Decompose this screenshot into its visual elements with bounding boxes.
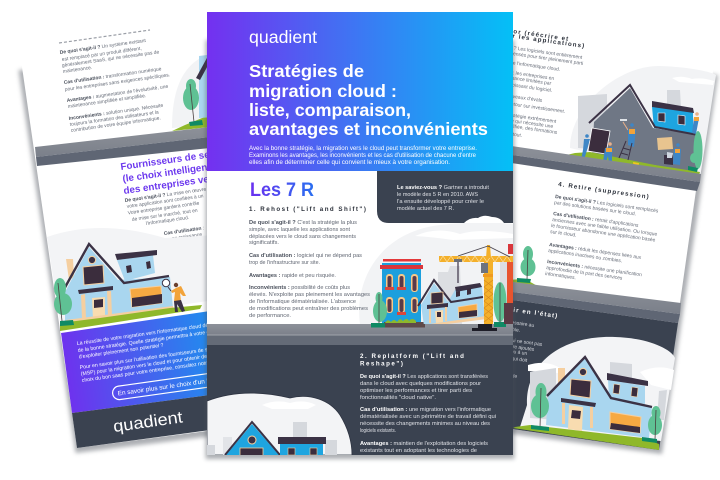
heading: Refactor: restructurer les applications) bbox=[468, 27, 586, 50]
road band: right page top bbox=[505, 145, 701, 191]
grass and bucket bbox=[558, 152, 700, 178]
text block: refactor details: le coût croissant du logiciel. bbox=[492, 80, 553, 94]
text block: service providers bbox=[124, 186, 225, 304]
heading: Fournisseurs de services: des entreprises vertes) bbox=[123, 171, 231, 197]
text block: service providers: revue bbox=[193, 296, 207, 304]
text block: service providers: l'organisation bbox=[183, 248, 213, 258]
text block: retain details: de bbox=[511, 373, 518, 380]
text block: top section of left page: toujours la formation des utilisateurs et la bbox=[69, 110, 159, 128]
text block: rehost details: Inconvénients : possibilité de coûts plus bbox=[249, 285, 350, 291]
house lifted by crane bbox=[418, 280, 487, 327]
text block: top section of left page: pour les entreprises sans exigences spécifiques. bbox=[64, 72, 170, 93]
text block: call to action copy: de la bonne stratégie. Quelle stratégie permettra à votre entreprise bbox=[77, 327, 230, 354]
tree left of building bbox=[371, 292, 387, 327]
panel: center page bbox=[206, 12, 514, 459]
text block: rehost details bbox=[249, 220, 370, 319]
heading: Les 7 R: Les 7 R bbox=[250, 179, 314, 201]
text block: call to action copy: choix du bon saas pour votre entreprise, consultez notre guide bbox=[81, 358, 224, 384]
text block: replatform details: De quoi s'agit-il ? Les applications sont transférées bbox=[360, 374, 488, 380]
logo: quadient footer: quadient bbox=[112, 408, 184, 436]
text block: retire details: sur le cloud. bbox=[550, 229, 577, 239]
text block: retire details: applications inactives ou zombies. bbox=[548, 248, 622, 264]
callout: Le saviez-vous: l'a ensuite développé pour créer le bbox=[397, 199, 484, 205]
text block: service providers: souhaitent bbox=[176, 238, 200, 247]
title: avantages et inconvénients bbox=[249, 119, 488, 139]
text block: retire details: approfondie de la part des services bbox=[546, 265, 623, 282]
text block: replatform details: existants tout en adoptant les technologies de bbox=[360, 448, 477, 454]
text block: replatform details: Avantages : maintien de l'exploitation des logiciels bbox=[360, 441, 488, 447]
illustration: blue house in bottom blob bbox=[207, 393, 352, 456]
panel: dark section of right page bbox=[505, 299, 678, 450]
illustration: house with inspector on left page bbox=[47, 228, 215, 331]
text block: retire details: Avantages : réduit les dépenses liées aux bbox=[549, 242, 642, 261]
text block: retain details: encore ajoutés bbox=[502, 343, 535, 353]
text block: rehost details: significatifs. bbox=[249, 240, 279, 246]
text block: top section of left page: De quoi s'agit-il ? Un système existant bbox=[59, 38, 147, 56]
text block: rehost details: élevés. N'exploite pas pleinement les avantages bbox=[249, 292, 370, 298]
text block: refactor details: Cas : les entreprises en bbox=[502, 69, 555, 82]
text block: top section of left page: maintenance simplifiée et simplifiée. bbox=[67, 93, 147, 110]
text block: service providers: l'informatique cloud. bbox=[145, 215, 190, 227]
text block: retire details: anciennes avec une faible utilisation. Ou lorsque bbox=[552, 217, 658, 238]
text block: retire details: De quoi s'agit-il ? Les logiciels sont remplacés bbox=[555, 194, 659, 215]
button: En savoir plus: En savoir plus sur le choix d'un MSP bbox=[117, 376, 221, 397]
text block: refactor details: De quoi s'agit-il ? Les logiciels sont entièrement bbox=[476, 40, 583, 61]
title bbox=[249, 61, 488, 139]
illustration: workers renovating a grey house bbox=[558, 66, 716, 178]
illustration: pastel house on right page bbox=[513, 337, 675, 450]
text block: rehost details: trop de l'infrastructure sur site. bbox=[249, 260, 320, 266]
text block: replatform details: dans le cloud avec quelques modifications pour bbox=[360, 381, 481, 387]
heading: Rehost: 1. Rehost ("Lift and Shift") bbox=[249, 206, 367, 213]
text block: replatform details: dématérialisée avec un périmètre de travail défini qui bbox=[360, 414, 496, 420]
text block: replatform details: optimiser les performances et tirer parti des bbox=[360, 388, 472, 394]
text block: service providers: Avantages bbox=[187, 259, 213, 268]
text block: retire details: le fournisseur abandonne une application basée bbox=[551, 223, 656, 244]
text block: service providers: monde bbox=[189, 266, 205, 274]
text block: refactor details: et meilleur retour sur investissement. bbox=[485, 98, 566, 115]
text block: service providers: Votre entreprise gardera contrôle bbox=[127, 200, 200, 216]
text block: refactor details bbox=[472, 40, 584, 139]
text block: rehost details: De quoi s'agit-il ? C'est la stratégie la plus bbox=[249, 220, 357, 226]
text block: call to action copy: Pour en savoir plus sur l'utilisation des fournisseurs de services bbox=[79, 345, 225, 371]
icon: right tree bbox=[642, 406, 662, 443]
text block: call to action copy: (MSP) pour la migration vers le cloud et pour obtenir de l'aide bbox=[80, 352, 221, 377]
header: gradient banner bbox=[207, 12, 513, 171]
text block: top section of left page: maintenance. bbox=[62, 65, 93, 75]
text block: service providers: internes bbox=[181, 244, 200, 252]
button: En savoir plus bbox=[112, 369, 242, 400]
road band: left page bbox=[35, 127, 210, 166]
callout: Le saviez-vous: modèle actuel des 7 R. bbox=[397, 206, 454, 212]
heading: Fournisseurs de services bbox=[120, 146, 239, 197]
illustration: city scene with crane bbox=[359, 222, 513, 332]
intro paragraph: Avec la bonne stratégie, la migration vers le cloud peut transformer votre entreprise. bbox=[249, 146, 477, 152]
text block: top section of left page: est remplacé par un produit différent, bbox=[61, 46, 142, 63]
text block: retain details: Cas : des logiciels qui ne sont pas bbox=[468, 332, 543, 348]
text block: retire details bbox=[545, 194, 659, 282]
crane bbox=[439, 245, 513, 332]
text block: refactor details: de l'informatique cloud. bbox=[510, 60, 561, 73]
text block: call to action copy bbox=[76, 321, 230, 384]
text block: refactor details: main-d'œuvre qualifiée, des formations bbox=[472, 118, 558, 136]
text block: retain details bbox=[468, 316, 543, 380]
brick patch and desk bbox=[657, 137, 673, 150]
text block: rehost details: de modifications peut entraîner des problèmes bbox=[249, 306, 368, 312]
text block: replatform details: fonctionnalités "cloud native". bbox=[360, 395, 436, 401]
text block: service providers: nécessite bbox=[192, 289, 214, 298]
text block: top section of left page: généralement SaaS, qui ne nécessite pas de bbox=[61, 49, 160, 69]
text block: service providers: Inconvénients bbox=[191, 281, 225, 292]
text block: service providers: en croissance bbox=[171, 232, 203, 242]
intro paragraph: Examinons les avantages, les inconvénients et les cas d'utilisation de chacune d'entre bbox=[249, 153, 477, 159]
text block: retain details: qui doit bbox=[511, 356, 528, 364]
text block: rehost details: simple, avec laquelle les applications sont bbox=[249, 227, 350, 233]
trees right of crane bbox=[494, 282, 506, 327]
text block: top section of left page: Inconvénients : solution unique. Nécessite bbox=[68, 103, 164, 122]
illustration: tree and house edge at top of left page bbox=[172, 52, 215, 131]
text block: service providers: votre application sont confiées à un bbox=[126, 193, 204, 210]
panel: left tilted page bbox=[18, 25, 242, 453]
title: migration cloud : bbox=[249, 81, 397, 101]
window being installed bbox=[588, 128, 610, 154]
text block: retire details: Cas d'utilisation : retrait d'applications bbox=[553, 211, 639, 229]
icon: person with magnifying glass bbox=[162, 279, 186, 312]
scene base: crane footing over road bbox=[371, 324, 506, 331]
heading: Retire: 4. Retire (suppression) bbox=[558, 181, 650, 201]
text block: retain details: Le logiciel nécessaire au bbox=[480, 316, 535, 329]
heading: Refactor: 3. Refactor (réécrire et bbox=[478, 23, 570, 43]
heading: Fournisseurs de services: Fournisseurs de services bbox=[120, 146, 239, 173]
panel: dark footer bbox=[72, 395, 210, 448]
heading: Replatform: Reshape") bbox=[360, 360, 404, 368]
text block: rehost details: Avantages : rapide et peu risquée. bbox=[249, 273, 336, 279]
text block: top section of left page bbox=[59, 38, 170, 134]
heading fragment: left page top bbox=[59, 30, 150, 43]
text block: replatform details: Cas d'utilisation : une migration vers l'informatique bbox=[360, 407, 491, 413]
logo: quadient: quadient bbox=[249, 27, 317, 47]
tree at right edge bbox=[688, 131, 702, 172]
panel: gradient call to action bbox=[61, 311, 210, 413]
intro paragraph: elles afin de déterminer celle qui convient le mieux à votre organisation. bbox=[249, 160, 450, 166]
text block: retire details: Inconvénients : nécessite une planification bbox=[547, 259, 642, 278]
text block: retain details: est stable. bbox=[497, 325, 521, 334]
text block: replatform details: nécessite des changements minimes au niveau des bbox=[360, 421, 490, 427]
text block: refactor details: Avantages : niveaux d'évals bbox=[481, 90, 543, 104]
callout: Le saviez-vous: Le saviez-vous ? Gartner a introduit bbox=[397, 185, 489, 191]
text block: call to action copy: La réussite de votre migration vers l'informatique cloud dépend bbox=[76, 321, 220, 347]
text block: top section of left page: Cas d'utilisation : transformation numérique bbox=[63, 66, 162, 86]
icon: tree left of house bbox=[54, 278, 72, 321]
workers bbox=[581, 112, 699, 165]
text block: rehost details: de l'informatique dématérialisée. L'absence bbox=[249, 299, 356, 305]
text block: refactor details: coûteuse qui nécessite une bbox=[493, 116, 554, 130]
text block: service providers: De quoi s'agit-il ? La mise en œuvre de bbox=[124, 186, 214, 204]
heading: Replatform bbox=[360, 353, 465, 368]
text block: rehost details: de performance. bbox=[249, 313, 291, 319]
text block: retain details: ou à un bbox=[510, 349, 528, 357]
title: liste, comparaison, bbox=[249, 100, 411, 120]
intro paragraph bbox=[249, 146, 477, 166]
heading: Fournisseurs de services: (le choix intelligent bbox=[122, 162, 212, 185]
title: Stratégies de bbox=[249, 61, 364, 81]
text block: service providers: de mise sur le marché, tout en bbox=[131, 208, 198, 223]
red building bbox=[504, 244, 513, 324]
text block: retire details: par des solutions basées sur le cloud. bbox=[554, 200, 636, 217]
text block: call to action copy: d'exploiter pleinement son potentiel ? bbox=[78, 343, 164, 360]
text block: rehost details: déplacées vers le cloud sans changements bbox=[249, 234, 356, 240]
text block: replatform details bbox=[360, 374, 496, 454]
heading: Retain: 5. Retain (maintenir en l'état) bbox=[440, 297, 559, 320]
text block: refactor details: Inconvénients : stratégie extrêmement bbox=[473, 107, 557, 125]
text block: refactor details: et du temps. Surtout. bbox=[476, 127, 523, 139]
icon: left tree bbox=[531, 383, 549, 431]
text block: top section of left page: contribution de votre équipe informatique. bbox=[70, 115, 161, 134]
panel: dark lower section bbox=[207, 345, 513, 455]
icon: tree on right page bbox=[505, 246, 541, 288]
text block: service providers: Cas d'utilisation : bbox=[163, 225, 205, 237]
text block: retire details: informatiques. bbox=[545, 271, 576, 281]
road band: center page bbox=[207, 324, 513, 345]
callout: Le saviez-vous: le modèle des 5 R en 2010. AWS bbox=[397, 192, 478, 198]
road band: right page lower bbox=[505, 281, 681, 323]
heading: Replatform: 2. Replatform ("Lift and bbox=[360, 353, 465, 360]
text block: service providers: coins bbox=[190, 273, 203, 281]
text block: replatform details: logiciels existants. bbox=[360, 428, 396, 434]
blue building bbox=[380, 259, 425, 327]
text block: refactor details: repensés pour tirer pleinement parti bbox=[506, 50, 584, 67]
text block: top section of left page: Avantages : augmentation de l'évolutivité, une bbox=[66, 84, 169, 104]
text block: rehost details: Cas d'utilisation : logiciel qui ne dépend pas bbox=[249, 253, 362, 259]
callout: Le saviez-vous bbox=[377, 171, 513, 223]
text block: refactor details: croissance limitées par bbox=[501, 74, 552, 87]
panel: right tilted page bbox=[440, 23, 718, 454]
